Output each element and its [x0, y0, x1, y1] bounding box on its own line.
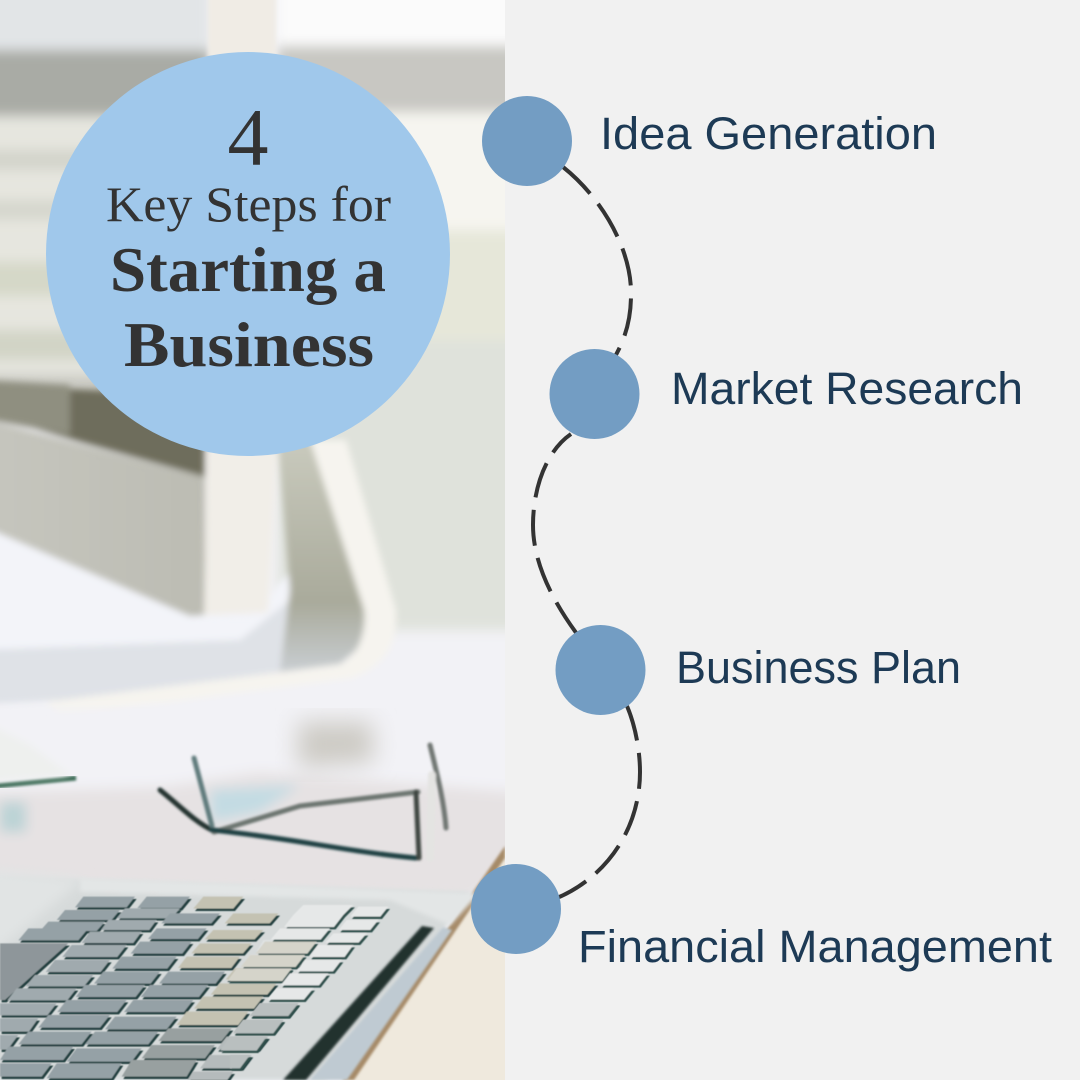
step label: Market Research: Market Research — [671, 363, 1023, 414]
green pen — [0, 778, 76, 786]
dashed arrow: market to plan — [533, 434, 580, 638]
window top right — [278, 0, 528, 630]
title line: Business: Business — [124, 309, 374, 380]
laptop deck — [0, 876, 470, 1080]
desk surface — [0, 772, 505, 892]
step label: Financial Management: Financial Management — [578, 921, 1053, 972]
key shadows — [2, 899, 305, 1080]
laptop front strip — [310, 927, 452, 1080]
window blinds top left — [0, 0, 210, 406]
tan keys — [122, 897, 292, 1077]
pale keys — [262, 941, 300, 966]
stand inner gap — [278, 440, 366, 672]
laptop edge — [342, 846, 505, 1080]
blurred object on desk — [298, 722, 374, 768]
keyboard: left and middle keys — [0, 897, 305, 1080]
eyeglasses — [160, 745, 446, 858]
step label: Idea Generation: Idea Generation — [600, 108, 937, 159]
title line: Starting a: Starting a — [110, 234, 386, 305]
title circle — [46, 52, 450, 456]
dark monitor shadow band — [38, 384, 210, 480]
step marker 3 — [556, 625, 646, 715]
step marker 4 — [471, 864, 561, 954]
dashed arrow: idea to market — [563, 167, 631, 360]
laptop slot — [283, 926, 434, 1080]
panel: right background — [505, 0, 1080, 1080]
table surface bottom right — [345, 850, 505, 1080]
monitor pillar — [202, 451, 272, 614]
dashed arrow: plan to financial — [552, 706, 640, 900]
step marker 2 — [550, 349, 640, 439]
window frame column — [206, 0, 276, 56]
title number: 4 — [228, 92, 268, 183]
step marker 1 — [482, 96, 572, 186]
stand arm — [309, 439, 398, 651]
step label: Business Plan: Business Plan — [676, 642, 961, 693]
monitor base — [274, 574, 294, 610]
monitor back — [0, 418, 205, 616]
blue-grey keys — [0, 897, 225, 1078]
keyboard: right keys — [220, 905, 390, 1071]
photo: blurred desk with monitor and laptop — [0, 0, 528, 1080]
title line: Key Steps for: Key Steps for — [106, 176, 391, 232]
